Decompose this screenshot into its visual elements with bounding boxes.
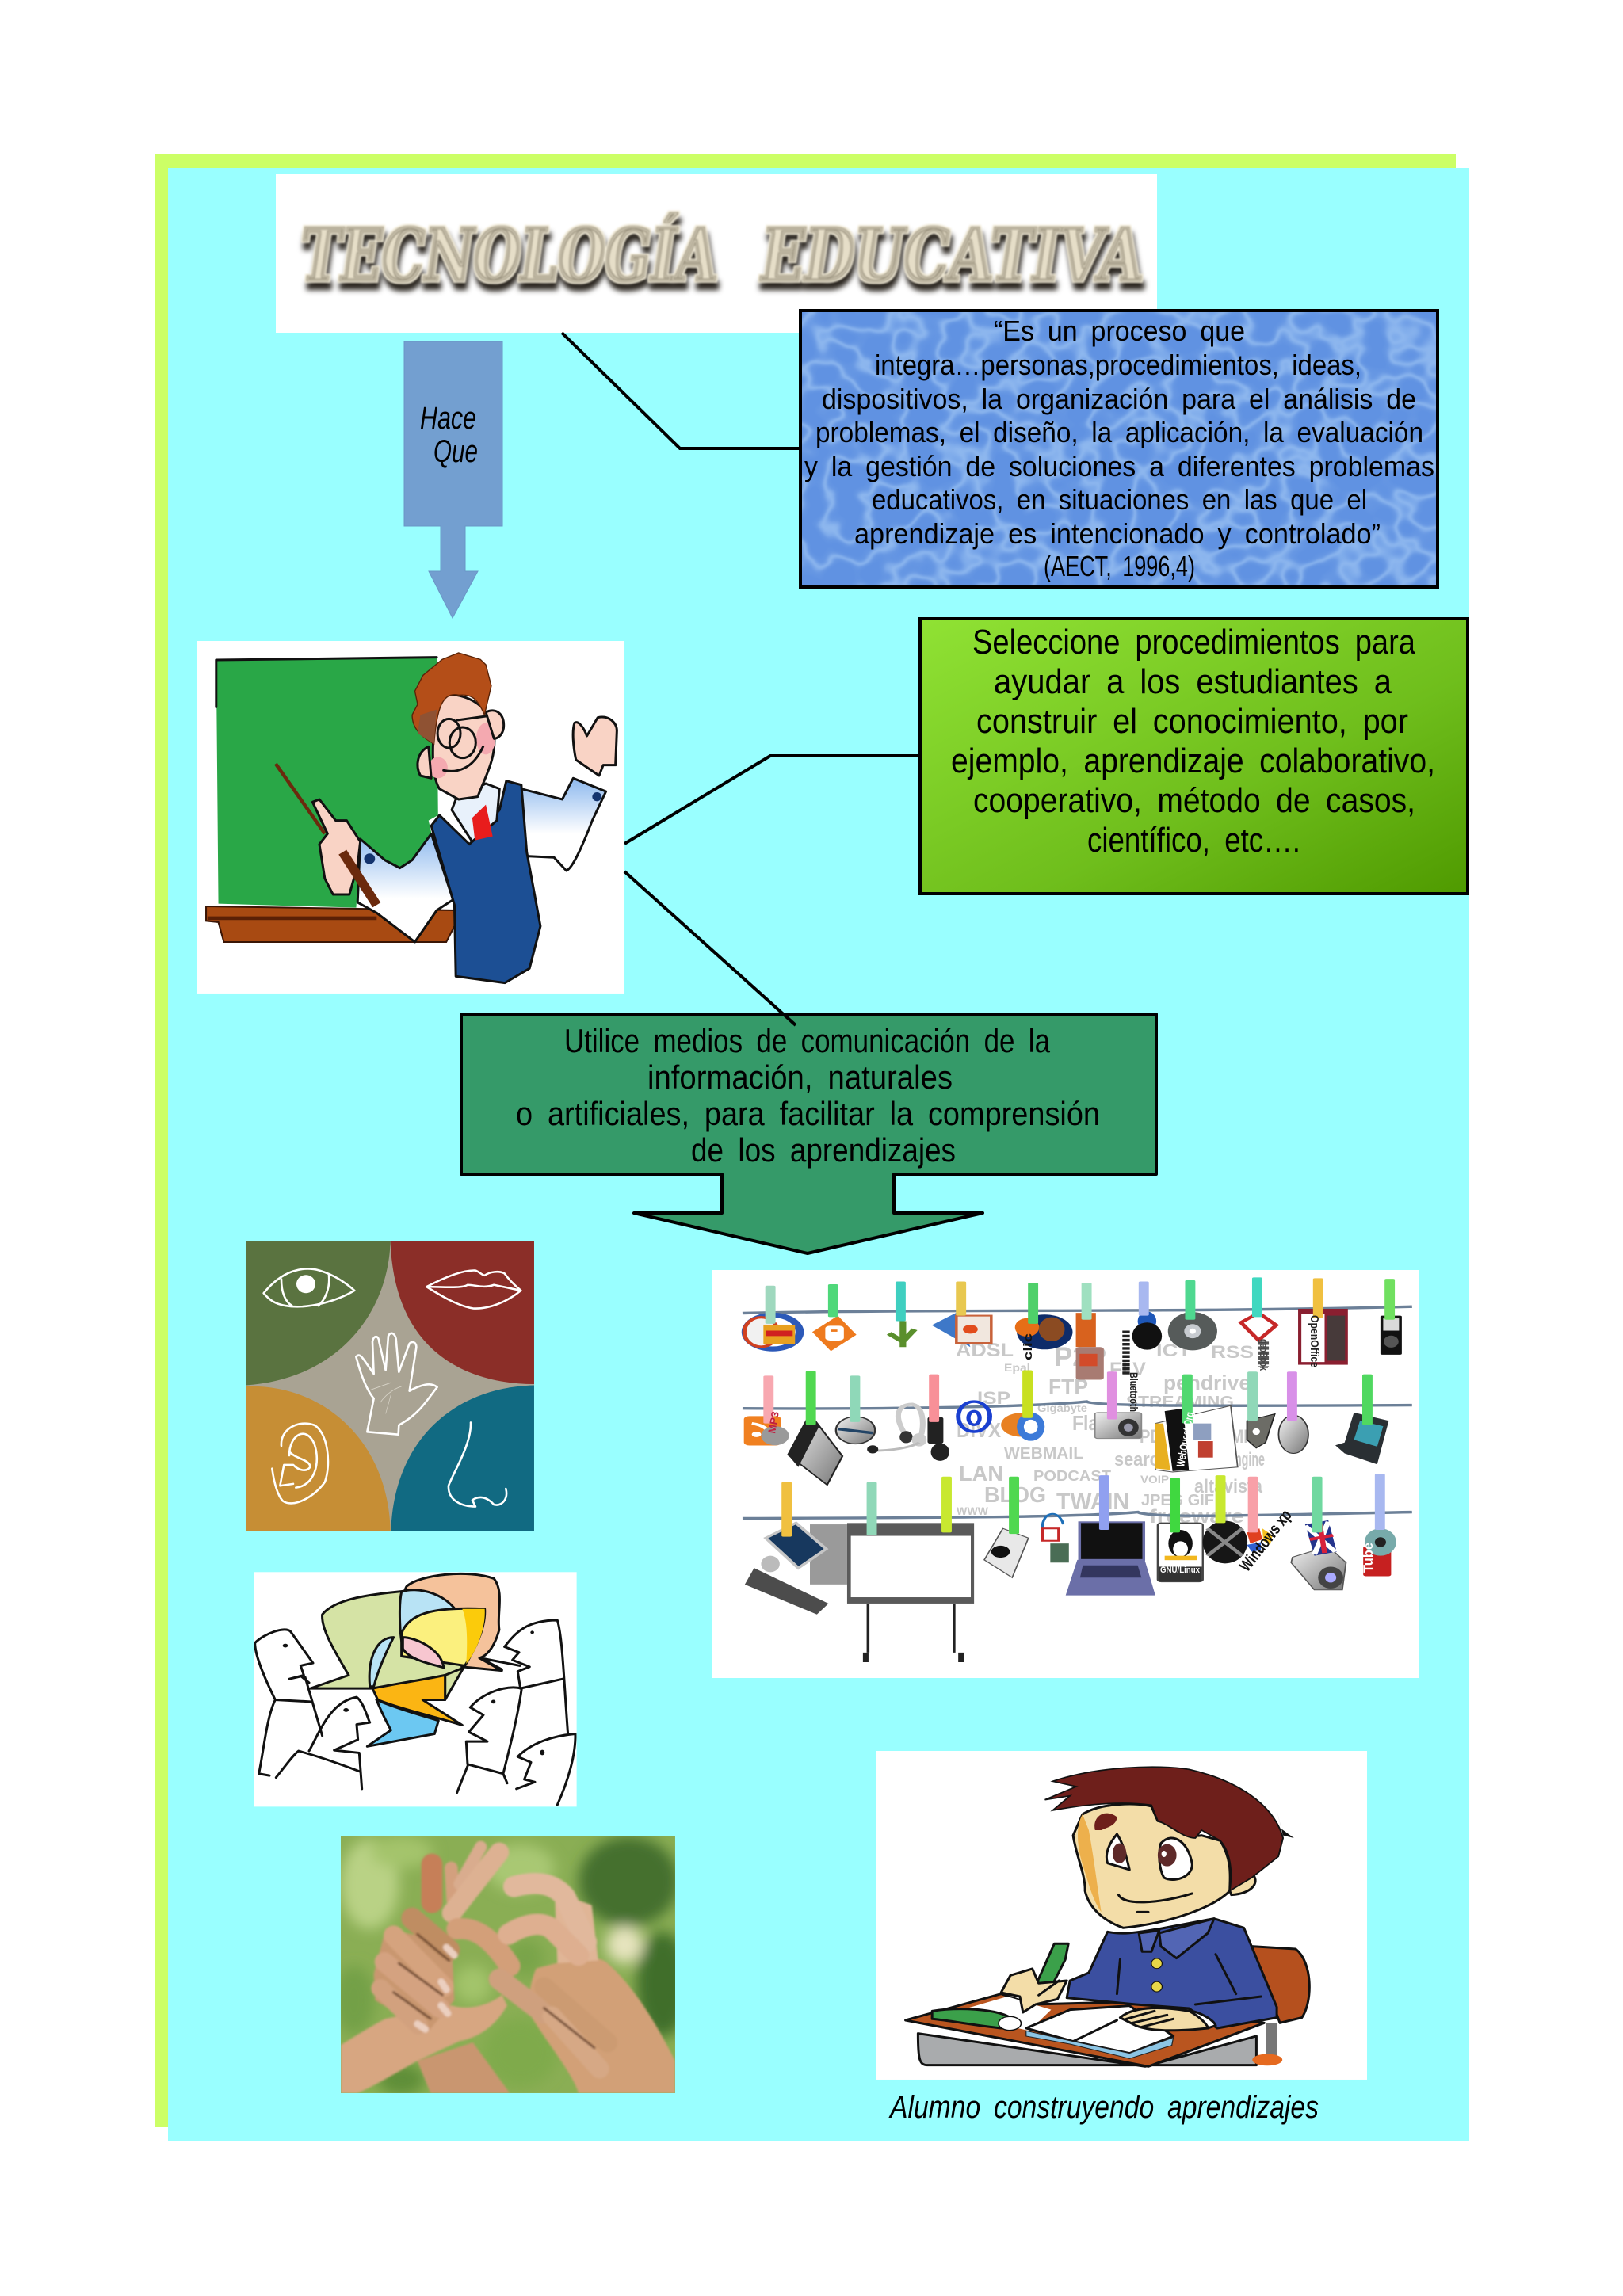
faded technology words: MP4 [1231,1426,1263,1447]
faded technology words: Flash [1072,1411,1120,1435]
faded technology words: search [1114,1449,1170,1470]
faded technology words: WEBMAIL [1004,1445,1083,1463]
procedures text: Seleccione procedimientos para [972,623,1415,662]
faded technology words: WWW [957,1505,989,1517]
procedures text [951,623,1435,860]
faded technology words: STREAMING [1126,1394,1234,1411]
definition text [804,315,1434,582]
icon labels: Tube [1361,1543,1376,1573]
faded technology words: freeware [1149,1506,1244,1527]
illustration: five senses [246,1241,534,1531]
icon labels: Windows xp [1236,1506,1296,1575]
icon labels: OpenOffice [1308,1315,1321,1367]
text: Hace Que: Hace [420,401,476,436]
definition text: (AECT, 1996,4) [1044,550,1195,582]
panel: select procedures [920,619,1468,894]
faded technology words: PDF [1140,1426,1171,1447]
panel: definition [800,311,1438,587]
definition text: y la gestión de soluciones a diferentes problemas [804,450,1434,482]
connector: teacher to media [624,871,796,1025]
faded technology words: RSS [1211,1342,1254,1362]
faded technology words: P2P [1054,1342,1106,1372]
icon labels: Bluetooth [1128,1372,1140,1412]
definition text: integra…personas,procedimientos, ideas, [875,349,1361,381]
faded technology words: ICT [1156,1341,1192,1360]
media text: Utilice medios de comunicación de la [564,1022,1051,1059]
icon labels [766,1315,1376,1575]
faded technology words: pendrive [1163,1371,1251,1394]
text: Hace Que: Que [433,434,478,469]
title text [301,212,1144,298]
connector: teacher to procedures [624,756,919,844]
faded technology words: BLOG [984,1482,1046,1507]
media text: información, naturales [647,1058,953,1096]
procedures text: ejemplo, aprendizaje colaborativo, [951,742,1435,780]
title panel [276,174,1157,333]
procedures text: cooperativo, método de casos, [973,781,1415,820]
definition text: educativos, en situaciones en las que el [872,483,1367,516]
faded technology words: VOIP [1140,1473,1169,1486]
clothes pegs [763,1277,1395,1537]
faded technology words: LAN [959,1461,1003,1486]
procedures text: científico, etc…. [1087,821,1300,860]
definition text: “Es un proceso que [994,315,1245,347]
faded technology words: Epal [1004,1361,1030,1374]
faded technology words: DIVX [957,1418,1002,1442]
faded technology words: altavista [1194,1476,1263,1497]
background: cyan main panel [168,168,1469,2141]
faded technology words: JPEG GIF [1141,1492,1214,1509]
connector: title to definition [562,333,802,448]
faded technology words: Gigabyte [1037,1402,1087,1414]
illustration: hands signing [333,1836,689,2096]
faded technology words: engine [1228,1449,1265,1470]
icon labels: GNU/Linux [1160,1566,1201,1575]
icon labels: WebQuest.Org [1174,1411,1196,1468]
icon labels: MP3 [766,1410,781,1435]
caption: Alumno construyendo aprendizajes [888,2090,1319,2125]
arrow: Hace Que [404,341,502,618]
definition text: problemas, el diseño, la aplicación, la evaluación [815,416,1423,448]
text: Hace Que [420,401,478,469]
title text: EDUCATIVA [760,212,1144,298]
faded technology words: FLV [1109,1359,1146,1380]
clothesline icons [743,1277,1412,1662]
title text: TECNOLOGÍA [301,212,718,298]
media text [516,1022,1100,1169]
faded technology words: ISP [977,1388,1010,1408]
media text: o artificiales, para facilitar la comprensión [516,1095,1100,1132]
definition text: dispositivos, la organización para el análisis de [822,383,1416,415]
illustration: student writing [876,1751,1367,2080]
illustration: people talking [254,1572,577,1806]
procedures text: ayudar a los estudiantes a [994,662,1392,701]
media text: de los aprendizajes [691,1131,956,1169]
faded technology words [956,1340,1265,1527]
faded technology words: FTP [1048,1375,1088,1398]
faded technology words: ADSL [956,1340,1014,1361]
faded technology words: TWAIN [1056,1489,1129,1515]
illustration: teacher at chalkboard [197,641,624,994]
panel: media box with arrow [461,1014,1156,1253]
faded technology words: PODCAST [1033,1468,1111,1484]
icon labels: clic [1022,1333,1035,1360]
illustration: technology clothesline [712,1270,1419,1678]
background: lime offset sheet [155,154,1456,2127]
definition text: aprendizaje es intencionado y controlado” [854,517,1381,550]
icon labels: geoBook [1258,1339,1270,1371]
procedures text: construir el conocimiento, por [976,702,1408,741]
